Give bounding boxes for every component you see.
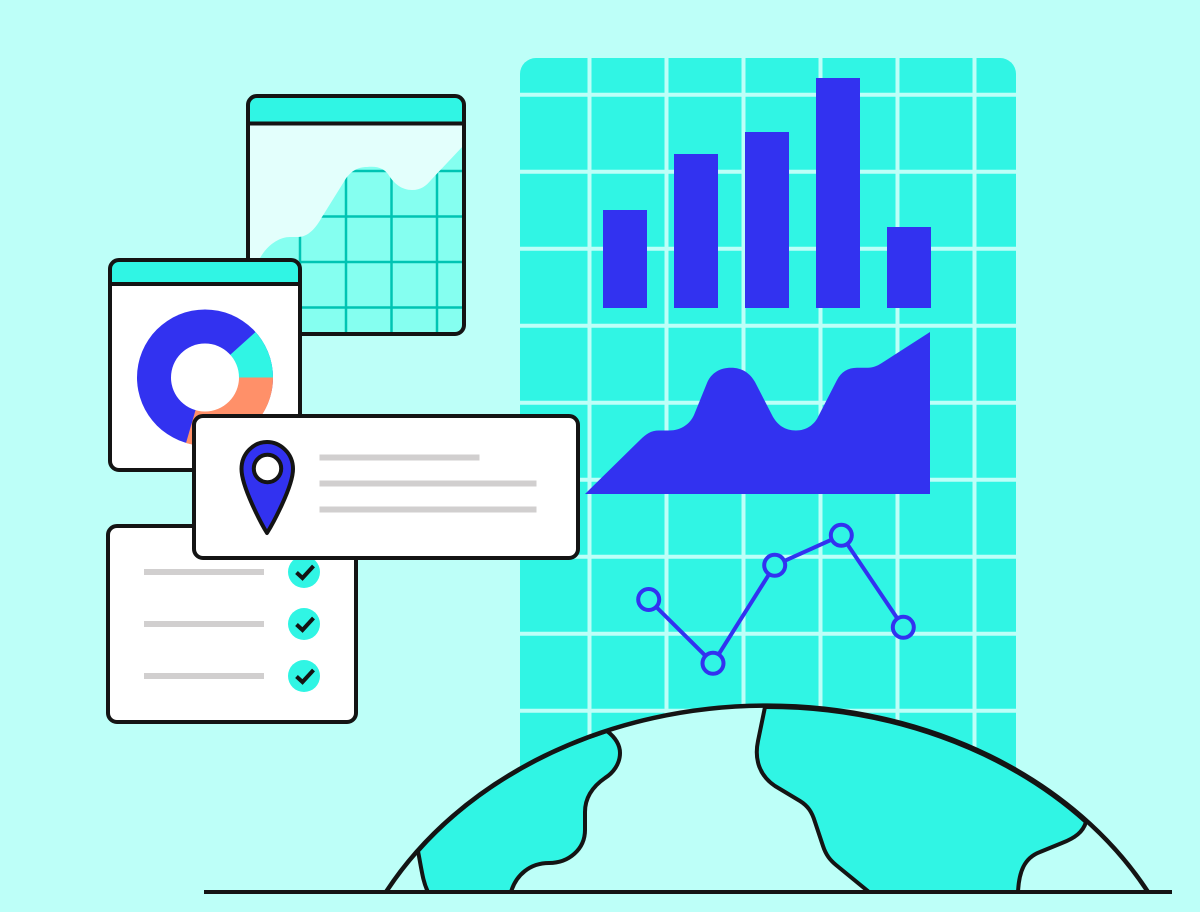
panel: area chart window [248,96,464,336]
area chart [585,332,930,494]
ground line [204,890,1172,894]
window header [110,260,300,284]
panel: checklist [108,526,356,722]
globe [204,706,1172,892]
line chart [638,525,914,674]
donut chart [137,310,273,446]
panel: location card [194,416,578,558]
window header [250,98,462,122]
light area [248,145,464,336]
bar chart [603,78,931,308]
panel: grid backdrop [520,58,1016,818]
continent: left [418,731,620,892]
teal grid [298,170,462,332]
globe rim [386,706,1148,892]
continent: right [757,707,1086,892]
check icons [288,556,320,692]
card lines [320,454,536,512]
icon: map pin [242,442,293,533]
globe outline [386,706,1148,892]
panel: donut chart window [110,260,300,470]
list lines [144,569,264,679]
